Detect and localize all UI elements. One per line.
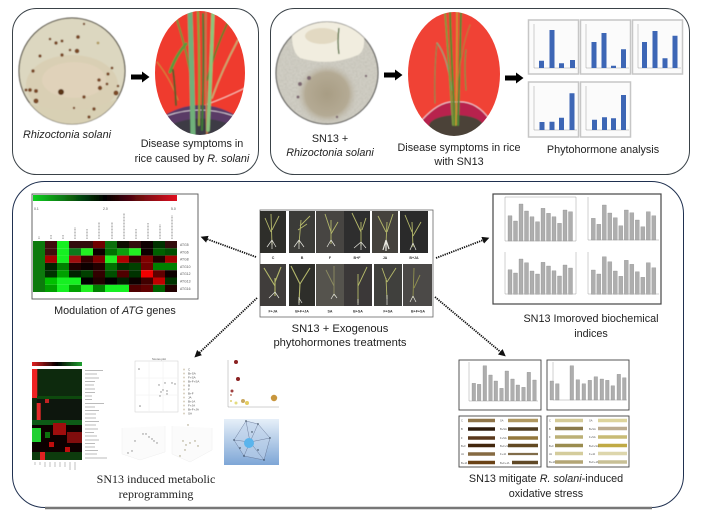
image: NBT stained leaves: B: [549, 427, 551, 431]
seedling: SA: [316, 264, 344, 314]
image: NBT stained leaves: C: [549, 418, 551, 422]
image: NBT stained leaves: B+F: [549, 444, 554, 448]
gene labels: ATG6: [180, 250, 189, 254]
caption: disease symptoms with SN13: Disease symptoms in rice: [398, 142, 520, 154]
caption: SN13 + Rhizoctonia solani: Rhizoctonia solani: [286, 147, 374, 159]
PCA legend: C: [188, 368, 191, 372]
seedling: B+F+SA: B+F+SA: [411, 310, 425, 314]
caption: metabolic reprogramming: reprogramming: [119, 487, 193, 501]
image: NBT stained leaves: [547, 416, 629, 467]
image: NBT stained leaves: F+JA: [589, 452, 595, 456]
caption: SN13 + exogenous phytohormones: SN13 + Exogenous: [292, 323, 389, 335]
image: diseased rice plant: [155, 11, 245, 135]
seedling: JA: [372, 211, 398, 260]
bar chart: top right: [588, 197, 659, 240]
bar chart: top left: [505, 197, 576, 241]
panel: SN13 and exogenous phytohormones: [12, 182, 684, 508]
caption: SN13 + exogenous phytohormones: phytohormones treatments: [273, 337, 407, 349]
image: DAB stained leaves: B: [461, 427, 463, 431]
caption: disease symptoms with SN13: with SN13: [433, 156, 484, 168]
caption: modulation of ATG genes: Modulation of ATG genes: [54, 305, 176, 317]
panel: R. solani infection: [12, 8, 258, 174]
image: DAB stained leaves: F+SA: [500, 436, 507, 440]
arrow: plate to symptoms: [384, 70, 402, 80]
caption: SN13 + Rhizoctonia solani: SN13 +: [312, 133, 348, 145]
heat map: metabolites: [32, 362, 107, 470]
image: DAB stained leaves: C: [461, 418, 463, 422]
PCA legend: JA: [188, 396, 192, 400]
seedling: F: [316, 211, 344, 260]
arrow: to biochemical indices: [436, 239, 486, 258]
bar chart: phytohormone 4: [528, 82, 578, 137]
gene labels: ATG10: [180, 265, 191, 269]
image: DAB stained leaves: B+SA: [500, 427, 507, 431]
seedling: SA: SA: [328, 310, 333, 314]
arrow: to metabolic reprogramming: [197, 298, 257, 355]
PCA legend: B+JA: [188, 400, 195, 404]
scatter plot: PCA: Scores plot: [152, 357, 166, 361]
seedling: B+F: B+F: [354, 256, 361, 260]
PCA legend: B+SA: [188, 372, 196, 376]
image: healthy rice plant with SN13: [408, 12, 500, 136]
bar chart: bottom left: [505, 252, 576, 294]
seedling: B+SA: B+SA: [353, 310, 363, 314]
gene labels: ATG8: [180, 258, 189, 262]
3D score plot: left: [122, 426, 165, 460]
caption: Rhizoctonia solani: Rhizoctonia solani: [23, 129, 112, 141]
seedling: F: F: [329, 256, 332, 260]
image: NBT stained leaves: SA: [589, 418, 593, 422]
panel: SN13 treatment and phytohormone analysis: [270, 8, 690, 174]
pathway network: [224, 419, 279, 465]
arrow: to ATG genes: [204, 238, 256, 257]
PCA legend: SA: [188, 412, 192, 416]
heat map: ATG genes: [32, 194, 198, 299]
PCA legend: F+JA: [188, 404, 195, 408]
seedling: B+F+JA: B+F+JA: [295, 310, 309, 314]
bar chart: phytohormone 5: [580, 82, 630, 137]
scatter plot: PCA: [135, 357, 199, 416]
heat map: ATG genes: 2.0: [103, 207, 108, 211]
bar chart: phytohormone 2: [580, 20, 630, 74]
image: SN13 and R. solani culture plate: [276, 22, 378, 125]
image: DAB stained leaves: F: [461, 436, 463, 440]
PCA legend: B: [188, 384, 190, 388]
seedling: C: C: [272, 256, 275, 260]
seedling: B+JA: B+JA: [409, 256, 419, 260]
image: DAB stained leaves: B+JA: [461, 461, 468, 465]
seedling: B+SA: [344, 264, 372, 314]
gene labels: ATG12: [180, 272, 191, 276]
bar chart: oxidative stress left: [459, 360, 541, 410]
gene labels: ATG5: [180, 243, 189, 247]
PCA legend: B+F+SA: [188, 380, 199, 384]
seedling: F+JA: [260, 264, 286, 314]
heat map: ATG genes: 0.1: [34, 207, 39, 211]
seedling: B+JA: [400, 211, 428, 260]
gene labels: ATG16: [180, 287, 191, 291]
arrow: plate to symptoms: [131, 72, 150, 82]
arrow: symptoms to analysis: [505, 72, 524, 84]
image: NBT stained leaves: B+JA: [549, 460, 556, 464]
PCA legend: B+F: [188, 392, 194, 396]
caption: improved biochemical indices: indices: [574, 328, 608, 340]
bar chart: phytohormone 1: [528, 20, 578, 74]
image: DAB stained leaves: F+JA: [500, 452, 506, 456]
3D score plot: right: [172, 424, 212, 462]
image: DAB stained leaves: [459, 416, 541, 467]
gene labels: [180, 243, 191, 291]
seedling: F+JA: F+JA: [269, 310, 278, 314]
seedling: B+F+SA: [403, 264, 432, 314]
bar charts: biochemical indices: [493, 194, 661, 304]
image: NBT stained leaves: JA: [549, 452, 552, 456]
caption: disease symptoms: rice caused by R. solani: [135, 153, 249, 165]
seedling: B: B: [301, 256, 304, 260]
image: NBT stained leaves: F+SA: [589, 435, 596, 439]
PCA legend: B+F+JA: [188, 408, 199, 412]
image: NBT stained leaves: F: [549, 435, 551, 439]
seedling: B+F+JA: [289, 264, 315, 314]
bar chart: phytohormone 3: [632, 20, 682, 74]
caption: disease symptoms: Disease symptoms in: [141, 138, 243, 150]
bar chart: oxidative stress right: [547, 360, 629, 410]
caption: phytohormone analysis: Phytohormone analysis: [547, 144, 660, 156]
PCA legend: F: [188, 388, 190, 392]
seedling: B: [289, 211, 315, 260]
caption: improved biochemical indices: SN13 Imoroved biochemical: [523, 313, 659, 325]
image: NBT stained leaves: B+SA: [589, 427, 596, 431]
image: NBT stained leaves: B+F+SA: [589, 444, 599, 448]
gene labels: ATG13: [180, 280, 191, 284]
image: DAB stained leaves: JA: [461, 452, 464, 456]
caption: metabolic reprogramming: SN13 induced metabolic: [97, 472, 215, 486]
seedling: B+F: [344, 211, 370, 260]
heat map: ATG genes: 5.0: [171, 207, 176, 211]
seedling: F+SA: F+SA: [383, 310, 393, 314]
seedling: JA: JA: [383, 256, 388, 260]
image: DAB stained leaves: B+F: [461, 444, 466, 448]
image: DAB stained leaves: SA: [500, 418, 504, 422]
caption: mitigated oxidative stress: oxidative stress: [509, 488, 584, 500]
image grid: rice seedlings by treatment: [260, 210, 433, 317]
seedling: C: [260, 211, 286, 260]
PCA legend: [188, 368, 199, 416]
bubble chart: pathway impact: [228, 360, 279, 407]
heat map cells: [33, 241, 177, 292]
caption: mitigated oxidative stress: SN13 mitigate R. solani-induced: [469, 473, 623, 485]
image: Rhizoctonia solani culture plate: [19, 18, 125, 130]
arrow: to oxidative stress: [435, 297, 503, 354]
PCA legend: F+SA: [188, 376, 196, 380]
image: NBT stained leaves: B+F+JA: [589, 460, 599, 464]
bar chart: bottom right: [588, 252, 659, 294]
image: DAB stained leaves: B+F+JA: [500, 461, 510, 465]
image: DAB stained leaves: B+F+SA: [500, 444, 510, 448]
seedling: F+SA: [374, 264, 402, 314]
